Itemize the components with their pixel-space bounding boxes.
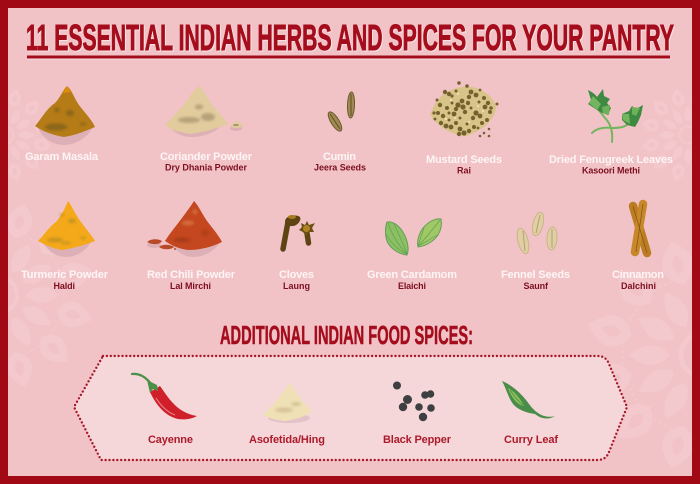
- spice: coriander powder: Coriander Powder: [160, 151, 253, 163]
- icon: curry leaf: [502, 381, 555, 418]
- item: curry leaf: Curry Leaf: [504, 434, 558, 446]
- spice: fennel seeds: [501, 211, 570, 291]
- icon: cardamom pods: [386, 219, 441, 255]
- panel: additional spices: [74, 356, 627, 460]
- icon: cloves: [283, 215, 315, 249]
- spice: dried fenugreek leaves: Dried Fenugreek Leaves: [549, 154, 673, 166]
- spice: turmeric powder: Turmeric Powder: [21, 269, 109, 281]
- item: black pepper: [383, 382, 452, 446]
- icon: fennel seeds: [515, 211, 558, 255]
- spice: coriander powder: Dry Dhania Powder: [165, 162, 247, 172]
- spice: green cardamom: [367, 219, 457, 291]
- spice: red chili powder: [147, 201, 236, 291]
- item: asofetida: Asofetida/Hing: [249, 434, 325, 446]
- spice: cumin: Jeera Seeds: [314, 162, 366, 172]
- spice: cinnamon: [612, 204, 664, 291]
- icon: red chili pile: [147, 201, 222, 257]
- spice: red chili powder: Red Chili Powder: [147, 269, 236, 281]
- spice: green cardamom: Green Cardamom: [367, 269, 457, 281]
- item: curry leaf: [502, 381, 558, 446]
- icon: chili pepper: [132, 374, 197, 419]
- icon: cinnamon sticks: [633, 204, 647, 253]
- spice: turmeric powder: Haldi: [54, 281, 75, 291]
- spice: mustard seeds: [426, 81, 502, 176]
- icon: mustard seeds pile: [430, 81, 498, 137]
- spice: fennel seeds: Saunf: [524, 281, 549, 291]
- spice: dried fenugreek leaves: Kasoori Methi: [582, 166, 640, 176]
- spice: garam masala: Garam Masala: [25, 151, 99, 163]
- spice: cumin: [314, 92, 366, 172]
- spice: garam masala: [25, 86, 99, 163]
- spice: fennel seeds: Fennel Seeds: [501, 269, 570, 281]
- icon: fenugreek sprig: [588, 89, 643, 142]
- icon: asofetida pile: [263, 383, 312, 423]
- panel outline: [74, 356, 627, 460]
- spice: dried fenugreek leaves: [549, 89, 673, 176]
- spice: cinnamon: Dalchini: [621, 281, 656, 291]
- spice: turmeric powder: [21, 201, 109, 291]
- section heading: ADDITIONAL INDIAN FOOD SPICES:: [220, 320, 473, 350]
- spice: cumin: Cumin: [323, 151, 356, 163]
- icon: peppercorns: [393, 382, 435, 421]
- item: cayenne: Cayenne: [148, 434, 193, 446]
- spice: mustard seeds: Rai: [457, 166, 471, 176]
- icon: turmeric pile: [38, 201, 95, 257]
- item: black pepper: Black Pepper: [383, 434, 452, 446]
- icon: coriander powder pile: [165, 86, 244, 137]
- spice: coriander powder: [160, 86, 253, 172]
- spice: cloves: Laung: [283, 281, 310, 291]
- icon: garam masala pile: [35, 86, 95, 145]
- spice: cloves: [279, 215, 315, 291]
- item: asofetida: [249, 383, 325, 446]
- spice: green cardamom: Elaichi: [398, 281, 426, 291]
- spice: mustard seeds: Mustard Seeds: [426, 154, 502, 166]
- item: cayenne: [132, 374, 197, 446]
- spice: cloves: Cloves: [279, 269, 314, 281]
- spice: cinnamon: Cinnamon: [612, 269, 664, 281]
- icon: cumin seeds: [326, 92, 355, 133]
- spice: red chili powder: Lal Mirchi: [170, 281, 211, 291]
